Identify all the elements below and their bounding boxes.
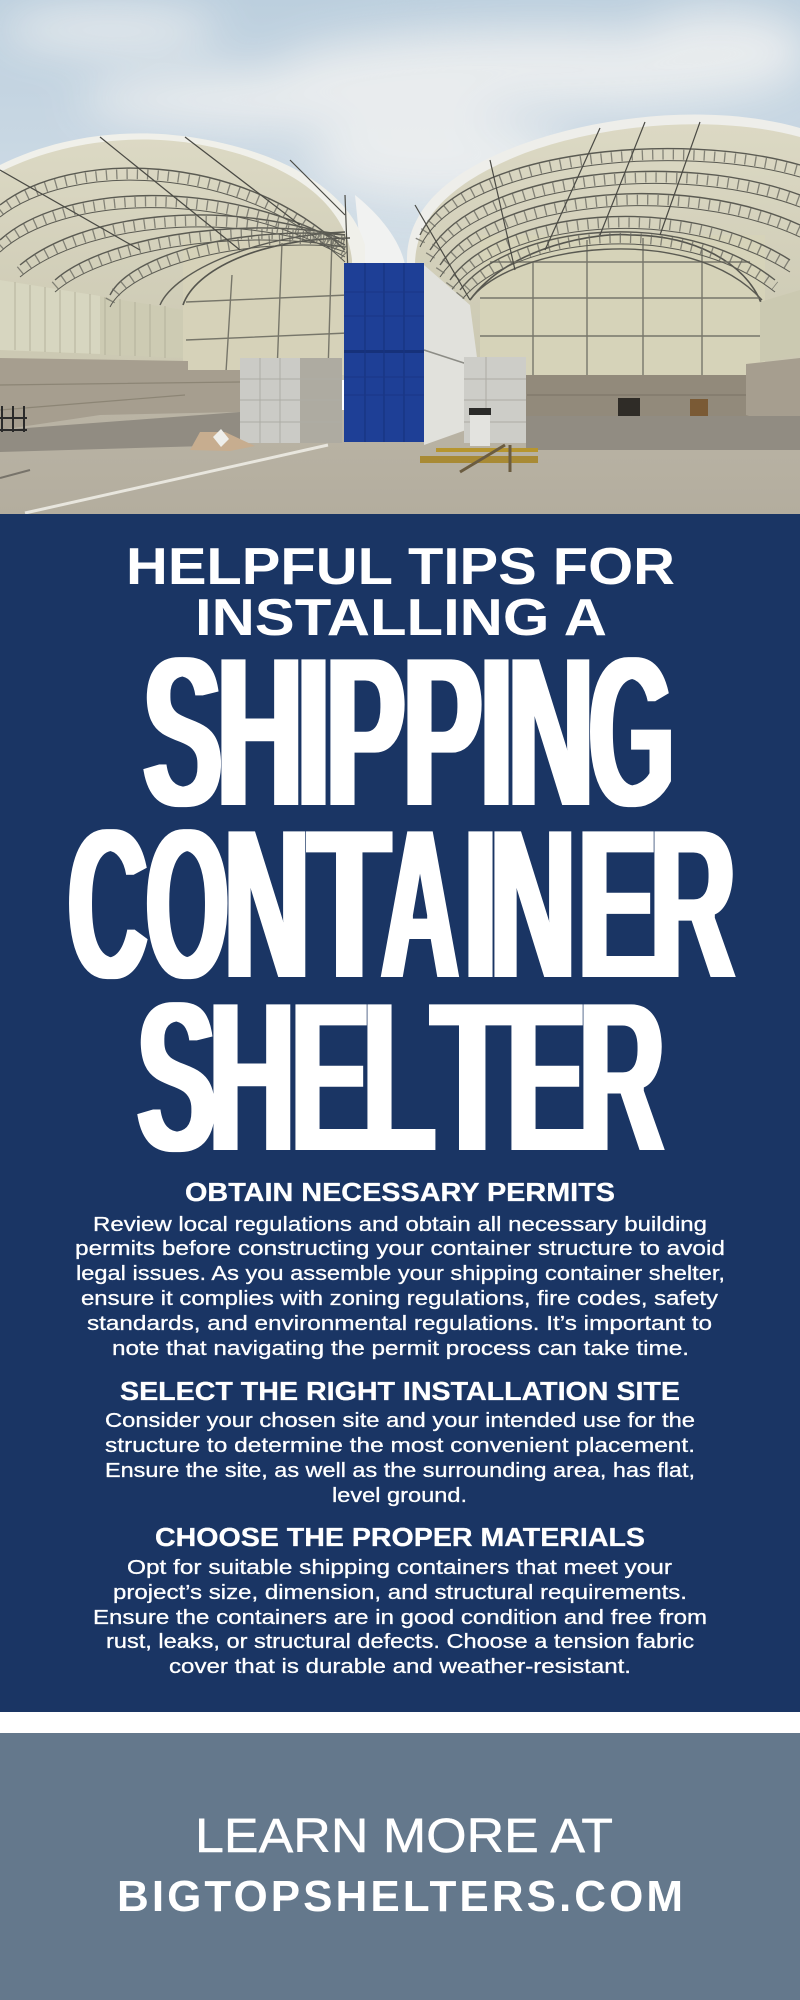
section: choose the proper materials: Opt for suitable shipping containers that meet your [127,1556,672,1579]
section: obtain necessary permits: legal issues. As you assemble your shipping container shelter, [76,1262,725,1285]
floor shadow [0,412,800,452]
concrete block stacks [240,357,526,443]
white container side [424,265,480,445]
title: helpful tips for installing a: INSTALLING A [195,589,607,647]
section: select the right installation site: structure to determine the most convenient placement. [105,1434,695,1457]
section: obtain necessary permits: OBTAIN NECESSARY PERMITS [185,1177,615,1207]
title: shipping container shelter: CONTAINER [68,783,736,1024]
right shelter [407,115,800,432]
title: helpful tips for installing a: HELPFUL TIPS FOR [126,538,675,596]
left concrete blocks [0,358,240,430]
section: select the right installation site: Consider your chosen site and your intended use for the [105,1409,695,1432]
title: helpful tips for installing a [126,538,675,647]
title: shipping container shelter: SHIPPING [143,611,674,852]
panel: navy content [0,514,800,1712]
central shelter roof behind container [355,195,405,265]
sky [0,0,800,340]
section: select the right installation site: Ensure the site, as well as the surrounding area, has flat, [105,1459,695,1482]
footer text: learn more at: LEARN MORE AT [195,1810,613,1863]
right back block wall [470,375,800,417]
section: obtain necessary permits: Review local regulations and obtain all necessary building [93,1213,707,1236]
panel: footer call to action [0,1733,800,2000]
footer text: website: BIGTOPSHELTERS.COM [117,1872,683,1921]
blue shipping container [344,263,424,442]
section: obtain necessary permits: ensure it complies with zoning regulations, fire codes, safety [81,1287,719,1310]
section: select the right installation site: SELECT THE RIGHT INSTALLATION SITE [120,1376,680,1406]
section: choose the proper materials: project’s size, dimension, and structural requirements. [113,1581,687,1604]
photo: container shelter [0,0,800,514]
section: choose the proper materials: Ensure the containers are in good condition and free from [93,1606,707,1629]
section: obtain necessary permits: note that navigating the permit process can take time. [112,1337,689,1360]
left shelter [0,133,365,430]
left trusses [0,168,345,307]
section: obtain necessary permits: standards, and environmental regulations. It’s important to [87,1312,712,1335]
section: choose the proper materials: rust, leaks, or structural defects. Choose a tension fabric [106,1630,694,1653]
section: obtain necessary permits [75,1177,725,1360]
ground [0,410,800,514]
title: shipping container shelter [68,611,736,1197]
right side wall [760,290,800,362]
section: choose the proper materials: CHOOSE THE PROPER MATERIALS [155,1522,645,1552]
right trusses [420,149,800,302]
drum [469,408,491,446]
section: obtain necessary permits: permits before constructing your container structure to avoid [75,1237,725,1260]
title: shipping container shelter: SHELTER [137,956,665,1197]
section: choose the proper materials: cover that is durable and weather-resistant. [169,1655,631,1678]
section: choose the proper materials [93,1522,707,1678]
section: select the right installation site [105,1376,695,1507]
section: select the right installation site: level ground. [332,1484,467,1507]
ground markings and debris [0,406,538,513]
